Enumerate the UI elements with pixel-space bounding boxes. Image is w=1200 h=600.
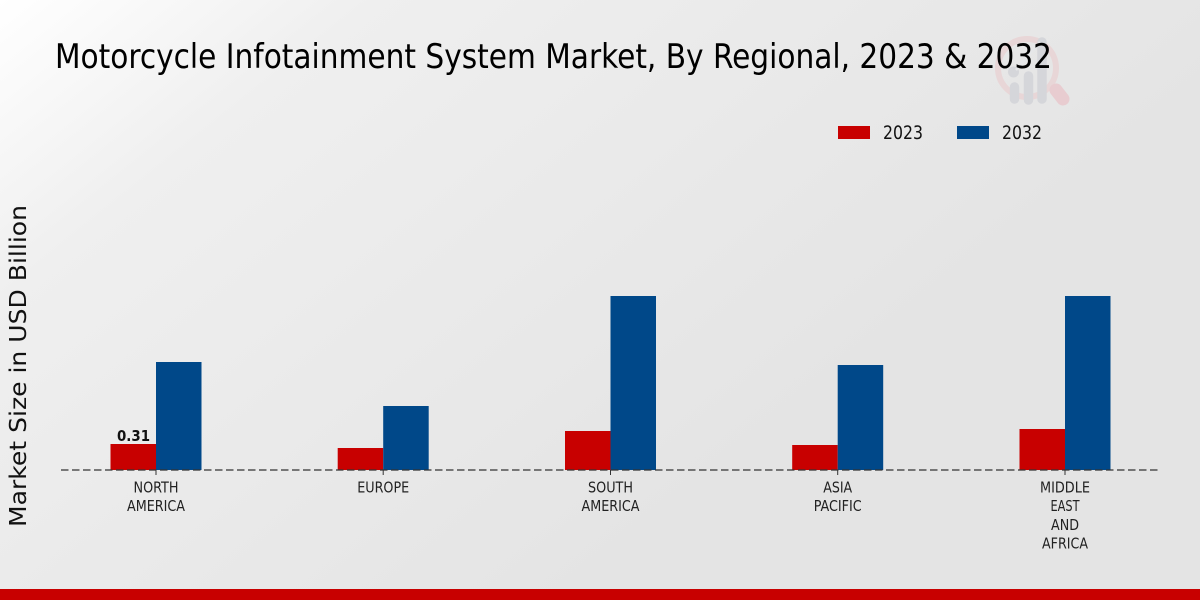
footer bar [0, 589, 1200, 600]
value label: 0.31 [117, 427, 150, 445]
label: Europe: EUROPE [357, 478, 409, 496]
label: North America: NORTH [134, 478, 178, 496]
icon: magnifier watermark [998, 39, 1063, 100]
legend item: 2023 [838, 123, 923, 144]
bar chart [61, 296, 1160, 475]
legend item: 2032: 2032 [1002, 123, 1042, 144]
label: South America: AMERICA [582, 497, 640, 515]
legend item: 2032 [957, 123, 1042, 144]
legend item: 2023: 2023 [883, 123, 923, 144]
label: Asia Pacific: ASIA [823, 478, 853, 496]
title: Motorcycle Infotainment System Market, By Regional, 2023 & 2032 [55, 37, 1052, 77]
category labels [127, 478, 1090, 553]
legend [838, 123, 1042, 144]
label: Asia Pacific: PACIFIC [814, 497, 862, 515]
bars: Asia Pacific [792, 365, 883, 470]
bars: Middle East and Africa [1020, 296, 1110, 470]
label: North America: AMERICA [127, 497, 185, 515]
label: Middle East and Africa: MIDDLE [1040, 478, 1090, 496]
bars: North America [110, 362, 202, 470]
label: Middle East and Africa: EAST [1050, 497, 1080, 515]
label: Middle East and Africa: AFRICA [1042, 535, 1088, 553]
bars: South America [565, 296, 656, 470]
label: Middle East and Africa: AND [1051, 516, 1079, 534]
bars: Europe [338, 406, 429, 470]
label: South America: SOUTH [588, 478, 633, 496]
y axis label: Market Size in USD Billion [4, 205, 32, 527]
